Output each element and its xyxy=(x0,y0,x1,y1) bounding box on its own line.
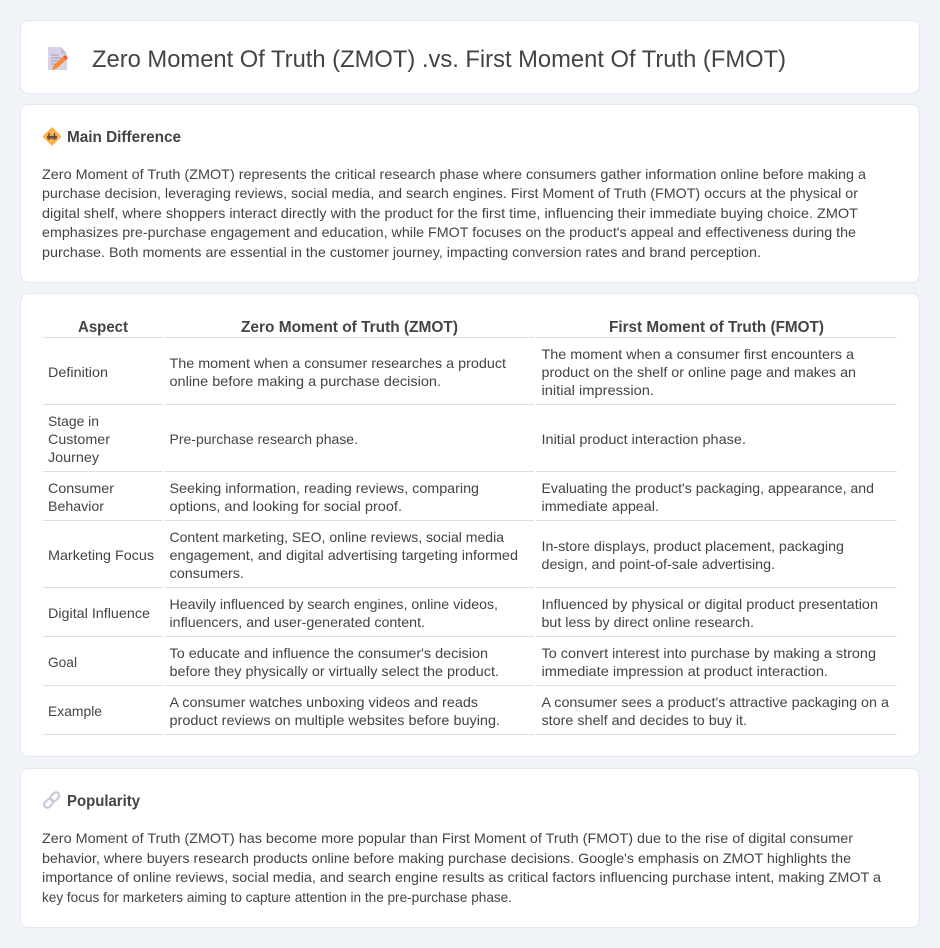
table row: definition: initial impression. xyxy=(542,382,654,398)
table row: goal: To convert interest into purchase by making a strong xyxy=(542,645,876,661)
table row: marketing focus: design, and point-of-sale advertising. xyxy=(542,556,775,572)
text block: main difference: Zero Moment of Truth (ZMOT) represents the critical research phase where consumers gather information online before making a xyxy=(42,166,866,182)
table row: digital influence: Heavily influenced by search engines, online videos, xyxy=(170,596,498,612)
table row: stage in customer journey xyxy=(48,413,746,465)
table row: marketing focus: In-store displays, product placement, packaging xyxy=(542,538,844,554)
text block: main difference xyxy=(42,166,866,260)
table row: definition xyxy=(48,346,856,398)
table row: example: A consumer watches unboxing videos and reads xyxy=(170,694,478,710)
table row: consumer behavior: Consumer xyxy=(48,480,114,496)
table row: marketing focus: Marketing Focus xyxy=(48,547,154,563)
panel: title card xyxy=(20,20,920,94)
text block: popularity: key focus for marketers aiming to capture attention in the pre-purchase phase. xyxy=(42,889,512,905)
icon: road sign diamond xyxy=(44,128,60,145)
table row: consumer behavior: Behavior xyxy=(48,498,104,514)
table row: definition: The moment when a consumer researches a product xyxy=(170,355,506,371)
heading: main difference: Main Difference xyxy=(67,129,181,146)
table row: example: Example xyxy=(48,703,102,719)
text block: popularity: behavior, where buyers research products online before making purchase decisions. Google's emphasis on ZMOT highlights the xyxy=(42,850,851,866)
table row: definition: Definition xyxy=(48,364,108,380)
table header row xyxy=(78,319,824,336)
icon: document with pencil xyxy=(48,47,68,70)
table row: stage in customer journey: Journey xyxy=(48,449,99,465)
table row: stage in customer journey: Pre-purchase research phase. xyxy=(170,431,358,447)
table row: digital influence: Influenced by physical or digital product presentation xyxy=(542,596,878,612)
table row: consumer behavior xyxy=(48,480,874,514)
table row: goal: Goal xyxy=(48,654,77,670)
table row: goal xyxy=(48,645,876,679)
text block: popularity: Zero Moment of Truth (ZMOT) has become more popular than First Moment of Truth (FMOT) due to the rise of digital consumer xyxy=(42,830,853,846)
panel: main difference xyxy=(20,104,920,282)
title: Zero Moment Of Truth (ZMOT) .vs. First Moment Of Truth (FMOT) xyxy=(92,46,786,73)
table row: definition: The moment when a consumer first encounters a xyxy=(542,346,854,362)
table row: goal: To educate and influence the consumer's decision xyxy=(170,645,488,661)
table row: stage in customer journey: Stage in xyxy=(48,413,99,429)
table row: definition: online before making a purchase decision. xyxy=(170,373,441,389)
icon: chain link xyxy=(43,791,61,809)
table row: marketing focus: Content marketing, SEO, online reviews, social media xyxy=(170,529,504,545)
table row: digital influence xyxy=(48,596,878,630)
panel: comparison table xyxy=(20,294,920,756)
table row: stage in customer journey: Initial product interaction phase. xyxy=(542,431,746,447)
table row: marketing focus xyxy=(48,529,844,581)
table row: example: A consumer sees a product's attractive packaging on a xyxy=(542,694,889,710)
table row: example: store shelf and decides to buy it. xyxy=(542,712,747,728)
table row: example xyxy=(48,694,889,728)
table row: goal: immediate impression at product interaction. xyxy=(542,663,828,679)
table header row: Zero Moment of Truth (ZMOT) xyxy=(241,319,458,336)
text block: main difference: digital shelf, where shoppers interact directly with the product for the first time, influencing their immediate buying choice. ZMOT xyxy=(42,205,858,221)
text block: popularity xyxy=(42,830,881,905)
text block: main difference: purchase. Both moments are essential in the customer journey, impacting conversion rates and brand perception. xyxy=(42,244,761,260)
table row: digital influence: influencers, and user-generated content. xyxy=(170,614,425,630)
table row: consumer behavior: immediate appeal. xyxy=(542,498,659,514)
table row: consumer behavior: Evaluating the product's packaging, appearance, and xyxy=(542,480,874,496)
table row: example: product reviews on multiple websites before buying. xyxy=(170,712,500,728)
table row: marketing focus: engagement, and digital advertising targeting informed xyxy=(170,547,518,563)
panel: popularity xyxy=(20,768,920,928)
table header row: First Moment of Truth (FMOT) xyxy=(609,319,824,336)
table row: consumer behavior: options, and looking for social proof. xyxy=(170,498,402,514)
table row: definition: product on the shelf or online page and makes an xyxy=(542,364,856,380)
heading: popularity: Popularity xyxy=(67,793,140,810)
table row: goal: before they physically or virtually select the product. xyxy=(170,663,499,679)
table row: stage in customer journey: Customer xyxy=(48,431,110,447)
text block: popularity: importance of online reviews, social media, and search engine results as critical factors influencing purchase intent, making ZMOT a xyxy=(42,869,881,885)
table row: digital influence: Digital Influence xyxy=(48,605,150,621)
table row: digital influence: but less by direct online research. xyxy=(542,614,754,630)
text block: main difference: emphasizes pre-purchase engagement and education, while FMOT focuses on the product's appeal and effectiveness during the xyxy=(42,224,856,240)
table header row: Aspect xyxy=(78,319,129,336)
table row: consumer behavior: Seeking information, reading reviews, comparing xyxy=(170,480,479,496)
table row: marketing focus: consumers. xyxy=(170,565,244,581)
text block: main difference: purchase decision, leveraging reviews, social media, and search engines. First Moment of Truth (FMOT) occurs at the physical or xyxy=(42,185,858,201)
